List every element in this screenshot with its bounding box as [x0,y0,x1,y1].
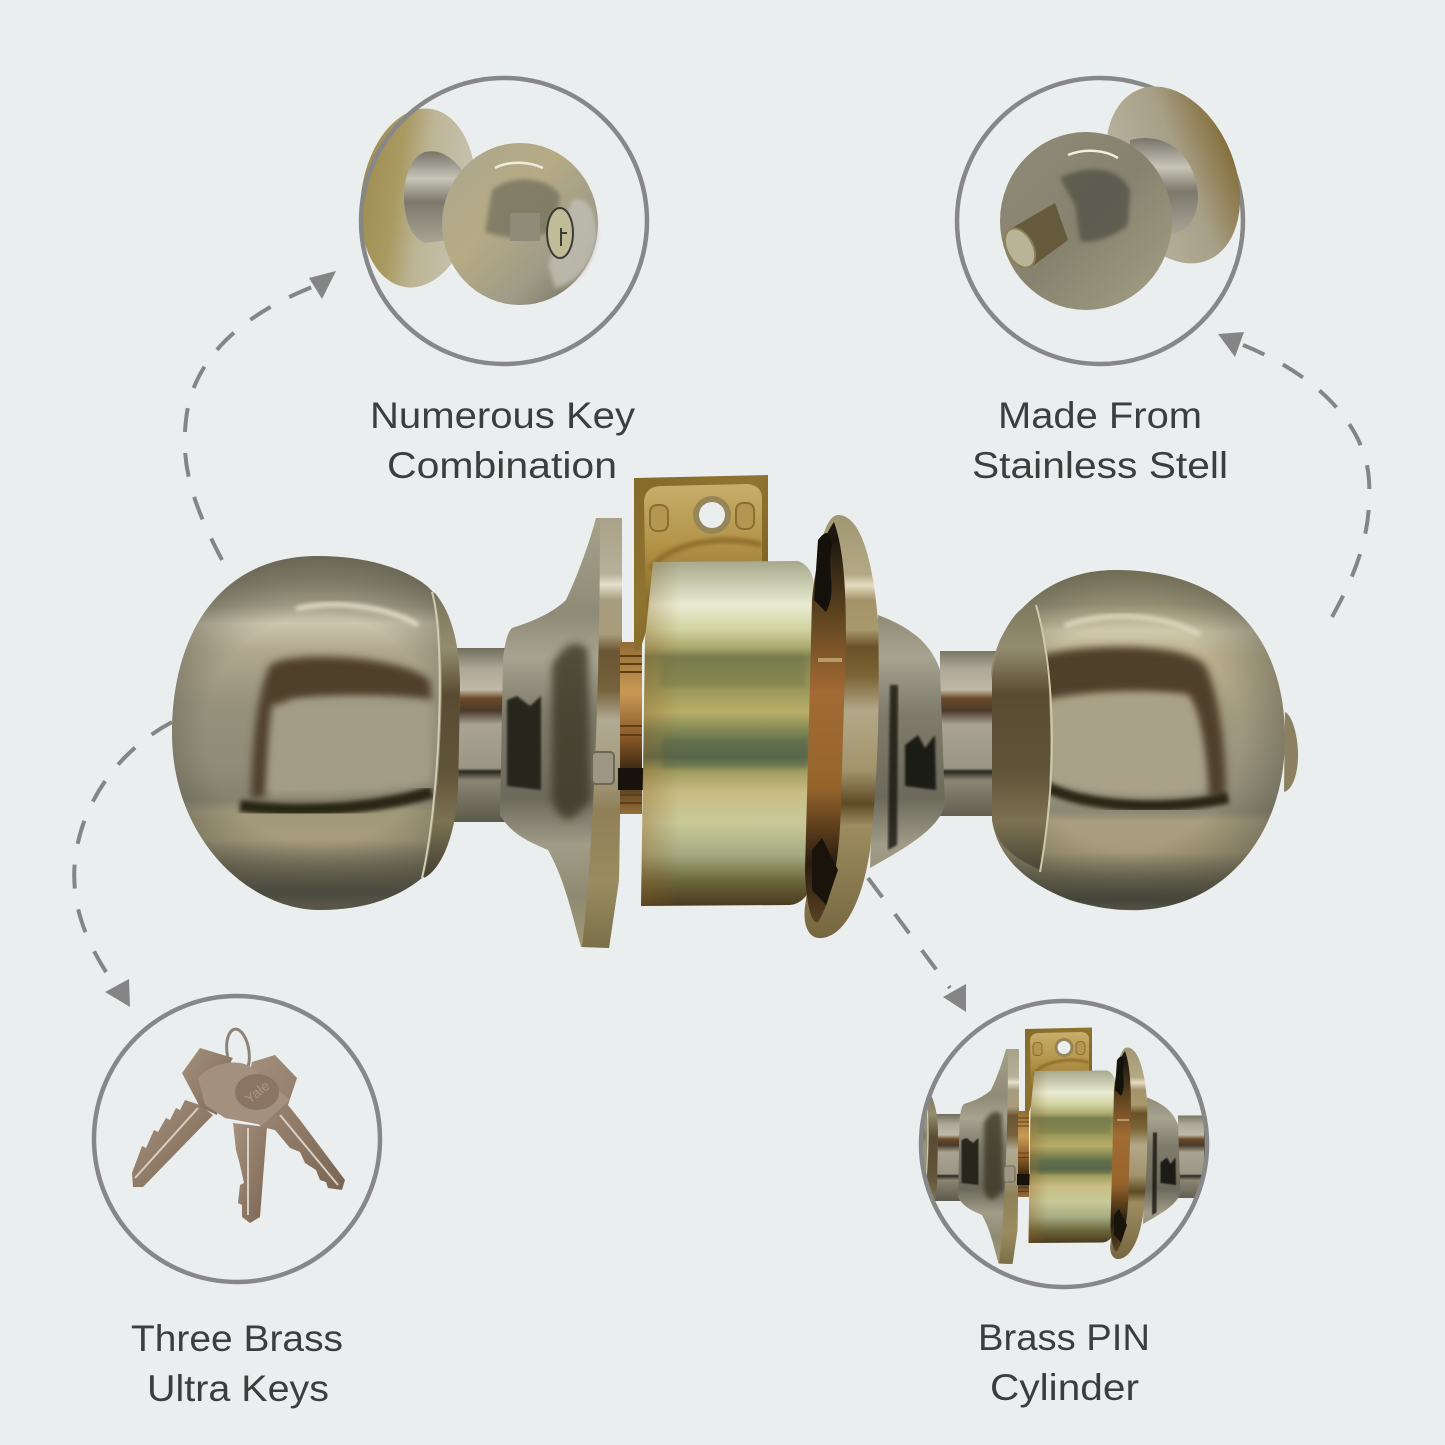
label: three brass ultra keys [131,1318,343,1409]
main product photo: door knob lock [172,475,1298,948]
keyway [547,208,573,258]
chrome neck [404,151,462,243]
mounting bracket [634,475,768,650]
label: brass pin cylinder [978,1317,1150,1408]
arrow: main lock to brass cylinder [868,878,966,1012]
chrome neck [1130,138,1198,235]
left neck [452,648,508,822]
feature circle: numerous key combination [349,78,647,364]
knob with reflection [1000,132,1172,310]
label: made from stainless steel: Made From [998,395,1202,436]
reflection [251,657,432,800]
label: brass pin cylinder: Cylinder [990,1367,1139,1408]
ring [921,1001,1207,1287]
right knob push pin [1284,712,1298,792]
key ring [224,1028,252,1076]
ring [361,78,647,364]
knob with reflection [442,143,598,305]
label: numerous key combination: Numerous Key [370,395,636,436]
label: brass pin cylinder: Brass PIN [978,1317,1150,1358]
lock close-up [920,998,1208,1290]
ring [957,78,1243,364]
feature circle: made from stainless steel [957,66,1265,364]
cylinder body [641,561,815,906]
central key bow [198,1063,290,1125]
maker disc [235,1074,279,1110]
label: three brass ultra keys: Three Brass [131,1318,343,1359]
label: made from stainless steel [972,395,1228,486]
left knob [172,556,460,910]
left key [132,1048,233,1187]
middle key [233,1123,267,1223]
left cone and flange [500,518,622,948]
rose plate [349,101,487,295]
right rose plate [804,515,879,938]
rose plate [1081,66,1265,284]
arrow: main lock to stainless steel [1218,332,1369,617]
right cone [870,615,945,868]
threaded tube [618,642,644,814]
push pin [1012,203,1068,268]
feature circle: three brass ultra keys [94,996,380,1282]
right knob neck [940,651,1012,816]
label: three brass ultra keys: Ultra Keys [147,1368,329,1409]
feature circle: brass pin cylinder [918,998,1210,1290]
label: numerous key combination: Combination [387,445,617,486]
arrow: main lock to keys [74,722,172,1007]
label: numerous key combination [370,395,636,486]
label: made from stainless steel: Stainless Stell [972,445,1228,486]
arrow: main lock to key combination [185,271,336,560]
right key [240,1055,345,1190]
maker name: Yale [241,1077,273,1107]
ring [94,996,380,1282]
right knob [991,570,1285,910]
